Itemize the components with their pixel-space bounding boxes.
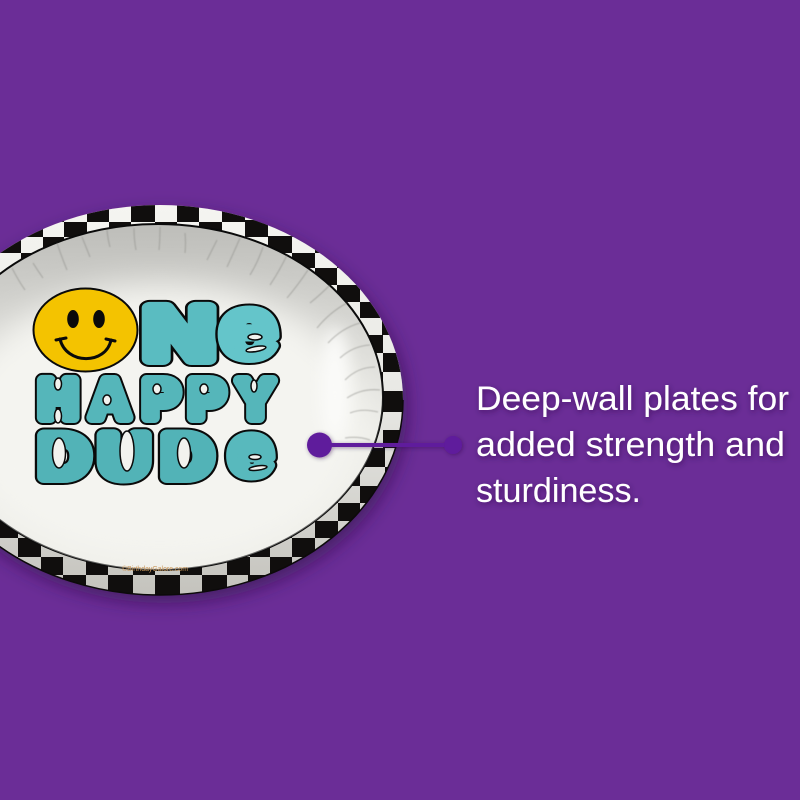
plate [0,205,410,595]
smiley face [34,288,138,372]
plate surface [0,224,383,570]
pleats [12,227,380,440]
word: DUDe: DUD [39,422,212,490]
callout text: added strength and [476,426,785,464]
word: Ne [143,280,277,376]
lettering: One Happy Dude [39,280,277,490]
callout text: Deep-wall plates for [476,380,789,418]
right wall glow [324,326,351,421]
word: DUDe: DUD [39,422,212,490]
word: DUDe: e [229,411,273,490]
word: DUDe [39,411,273,490]
bowl highlight [0,285,365,565]
plate base [0,205,403,595]
word: HAPPY: HAPPY [39,370,274,430]
word: HAPPY: HAPPY [39,370,274,430]
word: Ne: N [143,292,215,375]
checkered border [0,205,410,595]
word: Ne: e [220,280,277,376]
lower outer edge line [0,400,403,595]
plate shading [0,227,380,565]
copyright mark: ©BirthdayGalore.com [122,565,188,573]
word: Ne: e [220,280,277,376]
callout connector [307,432,462,458]
callout text [476,380,789,510]
callout text: sturdiness. [476,472,641,510]
word: DUDe: e [229,411,273,490]
word: Ne: N [143,292,215,375]
